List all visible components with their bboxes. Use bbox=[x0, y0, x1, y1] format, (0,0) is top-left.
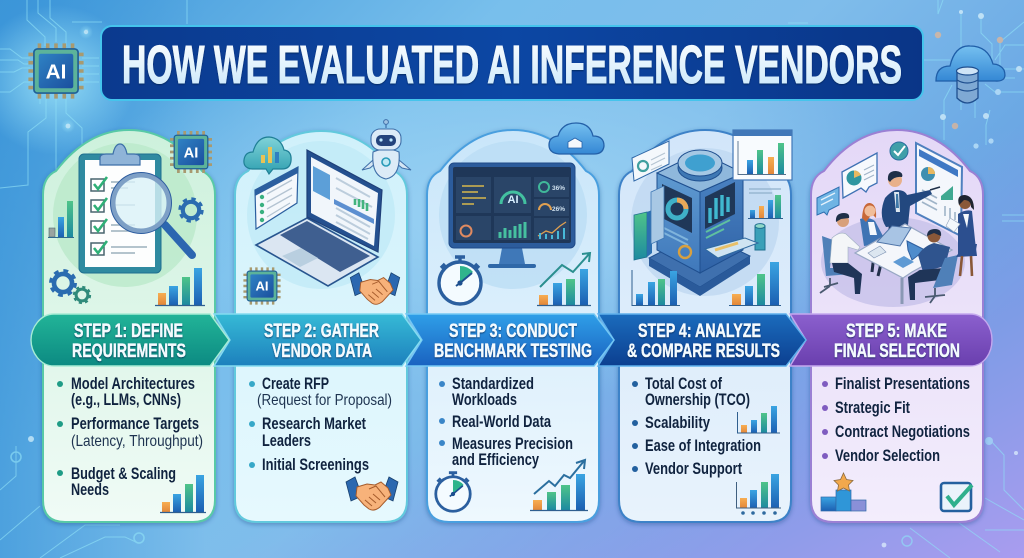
icon: browser window bbox=[255, 167, 298, 229]
bullet list: Create RFP bbox=[262, 375, 329, 393]
step 4 ribbon: & COMPARE RESULTS bbox=[627, 340, 780, 362]
bar chart with trend arrow bbox=[537, 253, 591, 306]
step 5 ribbon: FINAL SELECTION bbox=[834, 340, 960, 362]
icon: podium with star bbox=[821, 473, 866, 511]
icon: AI chip bbox=[170, 131, 212, 173]
bullet list: Ease of Integration bbox=[645, 437, 761, 455]
circuit lines: top left bbox=[0, 0, 187, 558]
bullet list: Research Market bbox=[262, 415, 366, 433]
icon: handshake bbox=[350, 273, 400, 304]
bar chart: small left bbox=[48, 201, 74, 238]
bar chart: lower bbox=[160, 475, 206, 512]
bullet list: Performance Targets bbox=[71, 415, 199, 433]
bullet list: Initial Screenings bbox=[262, 456, 369, 474]
bullet list bbox=[249, 375, 392, 474]
icon: stopwatch lower bbox=[436, 473, 470, 511]
step 2 ribbon: STEP 2: GATHER bbox=[264, 320, 379, 342]
laptop on table bbox=[868, 226, 925, 268]
bullet list bbox=[822, 375, 970, 465]
step 3 ribbon: BENCHMARK TESTING bbox=[434, 340, 592, 362]
step 4 ribbon: STEP 4: ANALYZE bbox=[638, 320, 761, 342]
bullet list: Model Architectures bbox=[71, 375, 195, 393]
icon: AI chip bbox=[243, 267, 281, 305]
icon: check box bbox=[941, 483, 972, 511]
step 5 ribbon: STEP 5: MAKE bbox=[846, 320, 947, 342]
bullet list: Scalability bbox=[645, 414, 711, 432]
panel: step 4 analyze and compare results bbox=[619, 130, 792, 522]
panel: step 2 gather vendor data bbox=[235, 120, 411, 522]
bar chart: upper bbox=[155, 268, 205, 306]
table bbox=[855, 224, 952, 278]
icon: dashboard monitor: 26% bbox=[552, 206, 565, 213]
step 1 ribbon bbox=[31, 314, 229, 366]
icon: dashboard monitor bbox=[449, 163, 575, 268]
icon: dashboard monitor: AI bbox=[508, 194, 518, 206]
bullet list: Measures Precision bbox=[452, 435, 573, 453]
seated man left bbox=[820, 213, 862, 294]
bullet list: Finalist Presentations bbox=[835, 375, 970, 393]
icon: gears bbox=[51, 199, 202, 303]
bullet list bbox=[632, 375, 761, 478]
bar chart: list lower bbox=[736, 474, 781, 515]
bullet list: (Request for Proposal) bbox=[257, 392, 392, 409]
bullet list: Strategic Fit bbox=[835, 399, 910, 417]
bullet list: Needs bbox=[71, 481, 109, 499]
icon: dashboard monitor: 36% bbox=[552, 185, 565, 192]
step 3 ribbon bbox=[406, 314, 614, 366]
bullet list: and Efficiency bbox=[452, 451, 540, 469]
icon: robot bbox=[362, 120, 411, 179]
standing woman bbox=[946, 195, 977, 276]
icon: AI chip: AI bbox=[184, 145, 198, 161]
icon: cylinder and tray bbox=[705, 224, 765, 258]
bullet list: (Latency, Throughput) bbox=[71, 433, 203, 450]
bar chart: list small bbox=[738, 406, 780, 433]
icon: check badge bbox=[890, 142, 908, 160]
title banner bbox=[101, 26, 923, 100]
step 3 ribbon: STEP 3: CONDUCT bbox=[449, 320, 577, 342]
bullet list: Ownership (TCO) bbox=[645, 391, 750, 409]
icon: handshake lower bbox=[346, 477, 398, 510]
presenter bbox=[882, 171, 940, 242]
step 2 ribbon bbox=[214, 314, 421, 366]
icon: cloud database top right bbox=[936, 46, 1005, 103]
panel: step 3 conduct benchmark testing bbox=[427, 123, 604, 522]
bullet list: Real-World Data bbox=[452, 413, 552, 431]
bullet list bbox=[439, 375, 573, 469]
icon: AI chip top left: AI bbox=[46, 60, 66, 83]
icon: side bars bbox=[634, 186, 664, 260]
icon: magnifying glass bbox=[110, 172, 192, 255]
bullet list: Vendor Support bbox=[645, 460, 742, 478]
step 1 ribbon: STEP 1: DEFINE bbox=[74, 320, 183, 342]
step 2 ribbon: VENDOR DATA bbox=[272, 340, 372, 362]
bar chart: bottom left bbox=[632, 270, 680, 306]
panel: step 5 make final selection bbox=[811, 130, 983, 522]
icon: stopwatch bbox=[439, 257, 481, 304]
bullet list: Leaders bbox=[262, 432, 311, 450]
bullet list: Contract Negotiations bbox=[835, 423, 970, 441]
icon: AI chip: AI bbox=[255, 279, 269, 294]
bullet list: Standardized bbox=[452, 375, 534, 393]
icon: chat bubble bbox=[817, 187, 839, 215]
bullet list: Workloads bbox=[452, 391, 517, 409]
seated man right bbox=[908, 229, 958, 303]
icon: report speech bubble bbox=[842, 153, 877, 198]
chart window bbox=[733, 130, 792, 180]
bullet list: Budget & Scaling bbox=[71, 465, 176, 483]
bar chart with trend arrow lower bbox=[530, 460, 588, 510]
icon: cloud chart bbox=[244, 137, 291, 174]
step ribbons bbox=[31, 314, 992, 366]
people around meeting table bbox=[820, 171, 977, 304]
bullet list: (e.g., LLMs, CNNs) bbox=[71, 391, 181, 409]
icon: tilted report bbox=[632, 141, 669, 181]
step 1 ribbon: REQUIREMENTS bbox=[72, 340, 186, 362]
bullet list: Vendor Selection bbox=[835, 447, 940, 465]
circuit lines: top right bbox=[788, 0, 1024, 558]
step 4 ribbon bbox=[598, 314, 806, 366]
bullet list bbox=[57, 375, 203, 499]
panel: step 1 define requirements bbox=[43, 130, 215, 522]
bar chart: bottom right bbox=[729, 262, 781, 306]
bullet list: Total Cost of bbox=[645, 375, 722, 393]
icon: presentation board bbox=[916, 143, 962, 236]
bar chart: right bbox=[748, 189, 783, 218]
icon: AI chip top left bbox=[28, 43, 84, 99]
icon: cloud bbox=[549, 123, 604, 154]
icon: clipboard checklist bbox=[79, 144, 161, 273]
step 5 ribbon bbox=[790, 314, 992, 366]
icon: laptop bbox=[256, 150, 382, 286]
icon: analytics machine bbox=[649, 150, 750, 296]
seated woman bbox=[860, 203, 884, 276]
